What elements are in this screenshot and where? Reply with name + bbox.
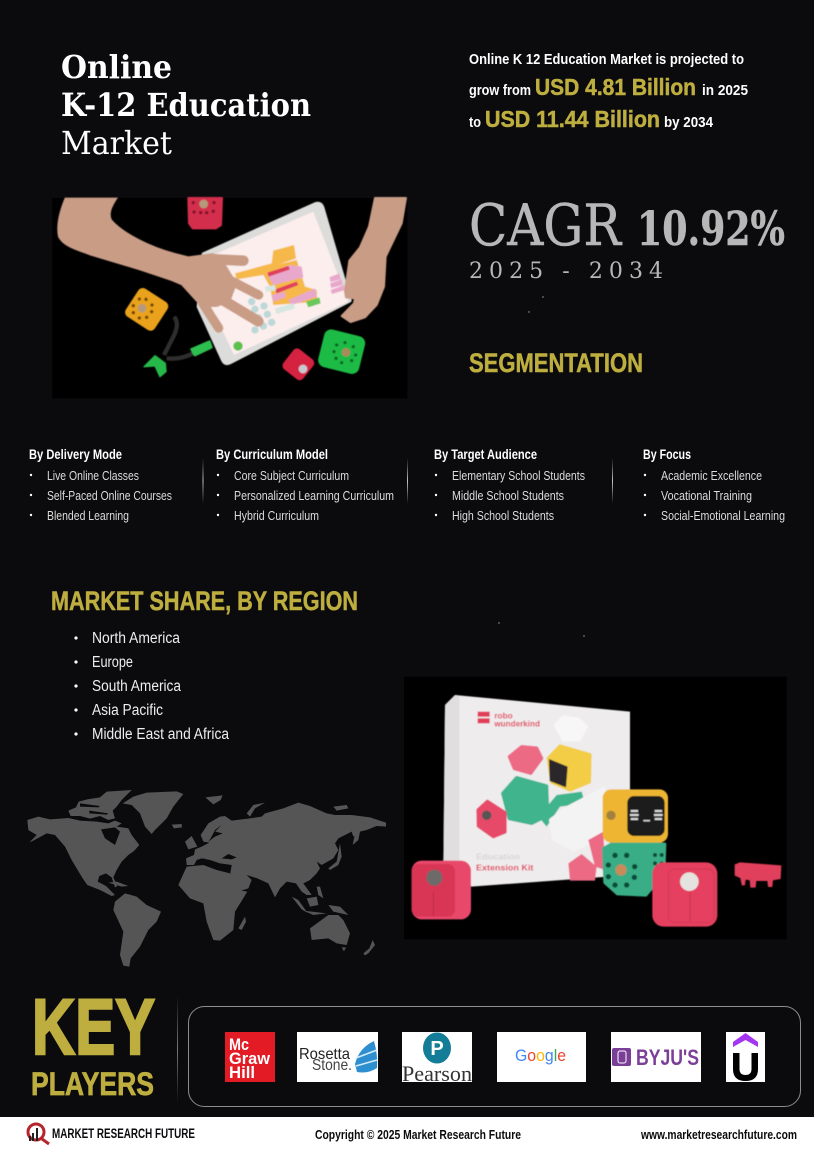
region list: North America (92, 630, 180, 647)
logo: McGraw Hill: Graw (229, 1050, 270, 1068)
photo: robo wunderkind education kit (404, 677, 787, 939)
icon: green cube stack base (603, 843, 665, 895)
footer bar (0, 1117, 814, 1150)
panel: company logos (188, 1006, 800, 1106)
market projection text: grow from (469, 83, 531, 99)
segment: by focus: Academic Excellence (661, 469, 762, 483)
segment: by curriculum model (216, 447, 394, 523)
segment: by delivery mode: Live Online Classes (47, 469, 139, 483)
icon: product box: Education (476, 852, 520, 862)
segment: by delivery mode: By Delivery Mode (29, 447, 122, 462)
region list: South America (92, 678, 181, 695)
segment: by focus: Vocational Training (661, 489, 752, 503)
segment: by curriculum model: Personalized Learning Curriculum (234, 489, 394, 503)
icon: product box: Extension Kit (476, 862, 534, 872)
icon: small red block (281, 347, 316, 382)
logo: BYJU'S: BYJU'S (636, 1045, 699, 1070)
region list: Europe (92, 654, 133, 671)
heading: key players (31, 982, 155, 1102)
logo: Google: Google (515, 1046, 566, 1065)
CAGR figure (469, 193, 785, 284)
icon: product box: robo (494, 711, 513, 721)
segment: by target audience (434, 447, 585, 523)
region list (74, 630, 229, 743)
footer bar: Copyright © 2025 Market Research Future (315, 1127, 521, 1142)
segment: by delivery mode: Self-Paced Online Courses (47, 489, 172, 503)
icon: red cube (188, 198, 222, 228)
title: Online (61, 48, 172, 86)
market projection text: to (469, 115, 481, 131)
CAGR figure: 2025 - 2034 (469, 259, 663, 284)
segment: by target audience: Elementary School Students (452, 469, 585, 483)
logo: Rosetta Stone (297, 1032, 378, 1082)
market projection text: USD 4.81 Billion (535, 74, 696, 100)
title: K-12 Education (61, 86, 311, 124)
market projection text (469, 52, 748, 132)
market projection text: in 2025 (702, 83, 748, 99)
heading: key players: KEY (32, 982, 155, 1071)
segment: by target audience: Middle School Students (452, 489, 564, 503)
logo: Pearson (402, 1032, 472, 1086)
logo: Udemy (726, 1032, 765, 1082)
segment: by delivery mode (29, 447, 172, 523)
icon: left pink block (412, 861, 471, 919)
icon: front pink block (652, 862, 717, 927)
icon: product box: wunderkind (493, 719, 540, 729)
region list: Asia Pacific (92, 702, 163, 719)
logo: Rosetta Stone: Rosetta (299, 1046, 350, 1063)
logo: Pearson: P (430, 1038, 444, 1060)
heading: market share by region: MARKET SHARE, BY REGION (51, 586, 358, 616)
CAGR figure: CAGR (469, 193, 623, 259)
market projection text: Online K 12 Education Market is projected to (469, 52, 744, 68)
segment: by focus: Social-Emotional Learning (661, 509, 785, 523)
title: Market (61, 124, 172, 162)
segment: by focus: By Focus (643, 447, 691, 462)
icon: left arm and hand (58, 198, 259, 328)
icon: green cube (317, 328, 367, 376)
region list: Middle East and Africa (92, 726, 229, 743)
icon: pink connector (735, 863, 781, 887)
photo: hands on tablet with robot cubes (52, 198, 407, 398)
segment: by curriculum model: Hybrid Curriculum (234, 509, 319, 523)
logo: Google (497, 1032, 586, 1082)
segment: by delivery mode: Blended Learning (47, 509, 129, 523)
segment: by target audience: By Target Audience (434, 447, 537, 462)
icon: product box (443, 695, 630, 887)
title (61, 48, 311, 162)
segment: by target audience: High School Students (452, 509, 554, 523)
icon: market research future logo (28, 1124, 49, 1144)
icon: yellow face cube (603, 789, 668, 843)
logo: Rosetta Stone: Stone. (312, 1057, 352, 1074)
heading: key players: PLAYERS (31, 1066, 154, 1102)
market projection text: USD 11.44 Billion (485, 106, 660, 132)
logo: Pearson: Pearson (402, 1061, 472, 1086)
world map (27, 790, 386, 967)
logo: McGraw Hill: Mc (229, 1036, 249, 1054)
logo: BYJU'S (611, 1032, 701, 1082)
heading: segmentation: SEGMENTATION (469, 348, 643, 378)
logo: McGraw Hill (225, 1032, 275, 1082)
icon: right arm and hand (342, 198, 406, 322)
icon: tablet (198, 203, 350, 363)
segment: by focus (643, 447, 785, 523)
market projection text: by 2034 (664, 115, 713, 131)
segment: by curriculum model: Core Subject Curriculum (234, 469, 349, 483)
Eurasia and nearby islands (185, 803, 386, 915)
segment: by curriculum model: By Curriculum Model (216, 447, 328, 462)
footer bar: MARKET RESEARCH FUTURE (52, 1126, 195, 1141)
icon: cable and green connectors (144, 317, 211, 377)
logo: McGraw Hill: Hill (229, 1064, 255, 1082)
icon: yellow cube (123, 286, 170, 333)
